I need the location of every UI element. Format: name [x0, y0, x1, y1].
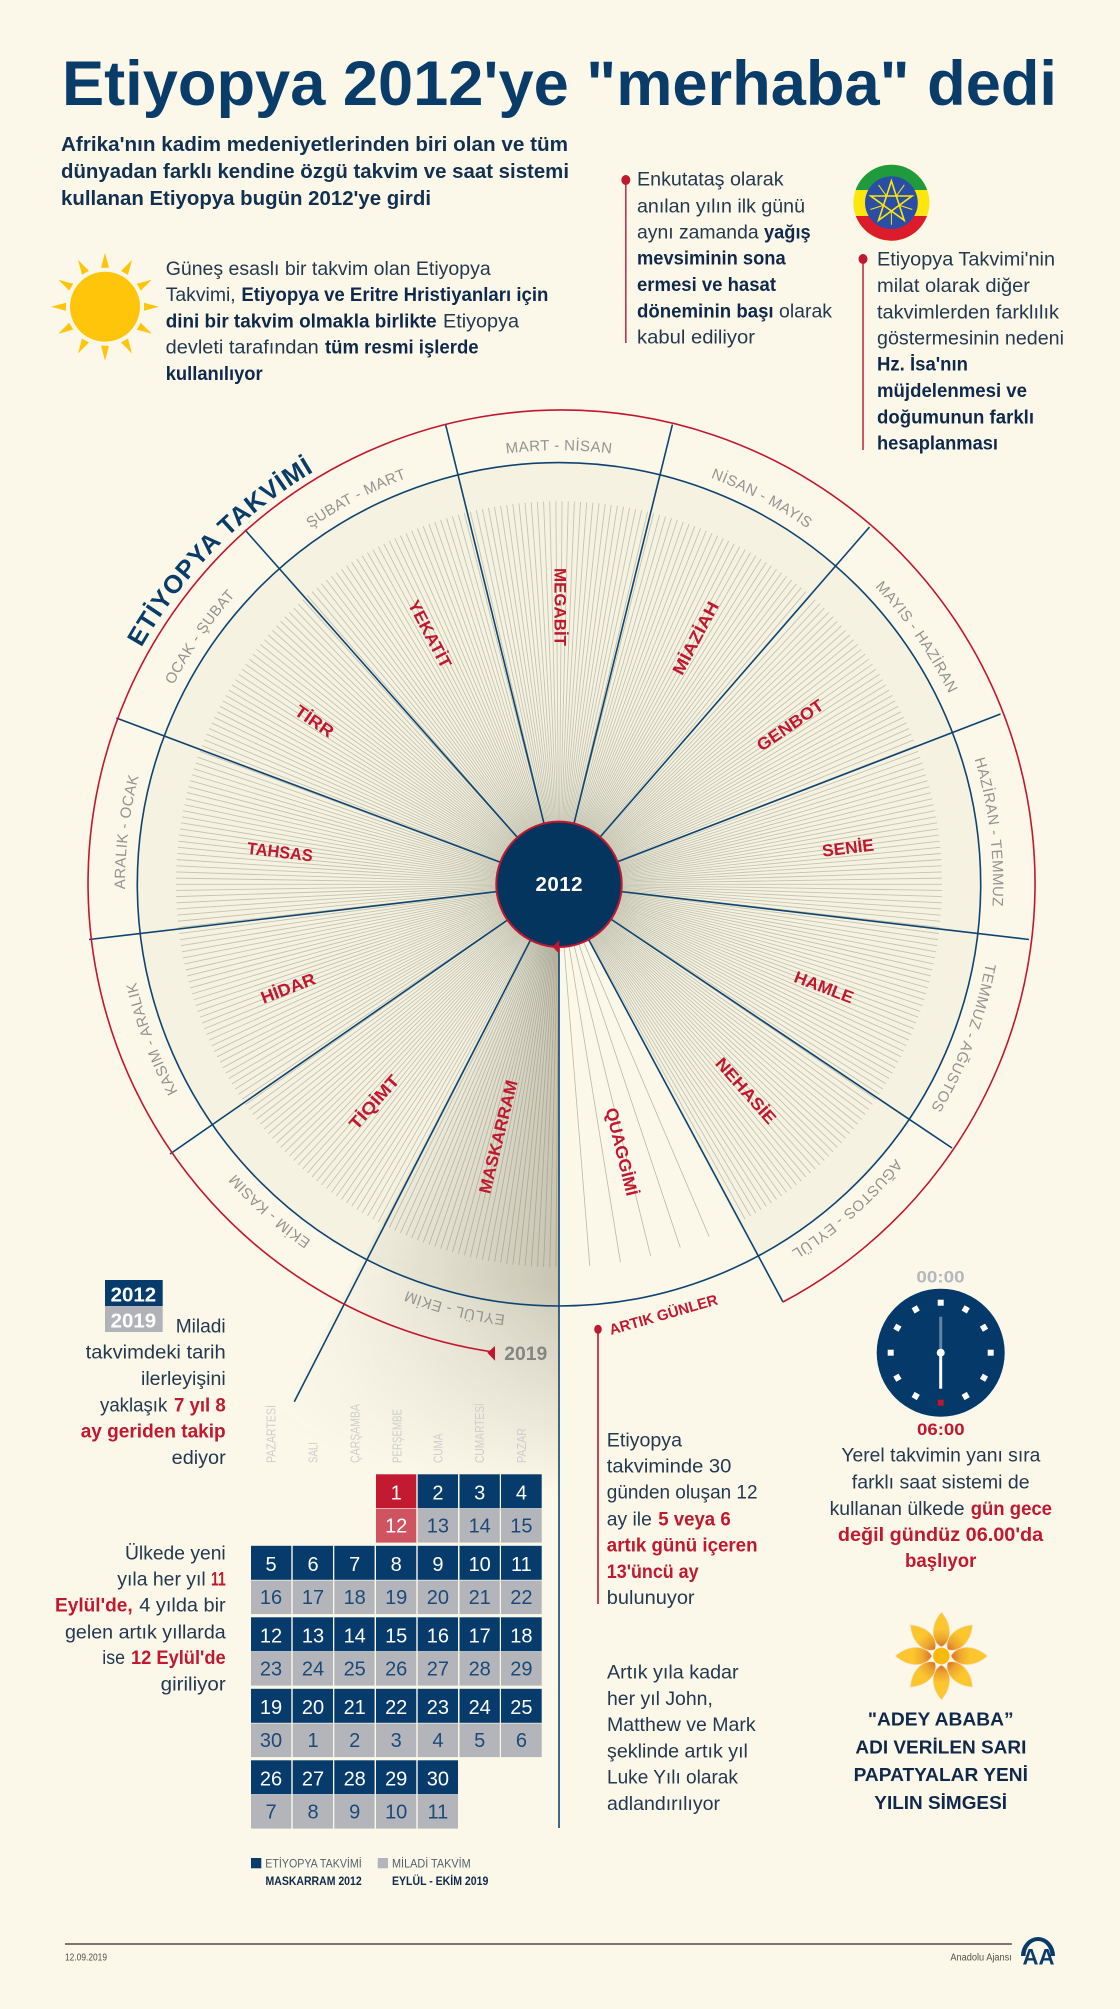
Ethiopian month labels: TİRR: [291, 701, 337, 741]
text block: 7 years 8 months behind: ay geriden takip: [81, 1421, 226, 1443]
calendar: weekday headers: PERŞEMBE: [390, 1409, 404, 1463]
callout: leap days: 13'üncü ay: [607, 1561, 699, 1583]
calendar: week 3: 18: [510, 1625, 533, 1647]
arrow: 2019 marker: [487, 1346, 495, 1361]
text block: solar calendar: devleti tarafından: [166, 336, 319, 358]
text block: 7 years 8 months behind: ilerleyişini: [141, 1368, 226, 1390]
calendar: week 1: 4: [516, 1482, 527, 1504]
calendar: week 2: 10: [469, 1554, 491, 1576]
calendar: week 2: [251, 1546, 542, 1614]
text block: solar calendar: dini bir takvim olmakla birlikte: [166, 310, 437, 332]
Gregorian month labels: EYLÜL - EKİM: [404, 1291, 504, 1325]
callout: leap days: bulunuyor: [607, 1587, 695, 1609]
Ethiopian month labels: GENBOT: [753, 695, 828, 755]
calendar: week 4: [251, 1689, 542, 1757]
calendar: week 1: [376, 1474, 542, 1543]
callout: calendar epoch: Hz. İsa'nın: [877, 353, 968, 376]
text block: Luke year: Matthew ve Mark: [607, 1714, 756, 1736]
text block: Luke year: Luke Yılı olarak: [607, 1767, 738, 1789]
text block: local time: başlıyor: [905, 1550, 977, 1572]
Gregorian month labels: HAZİRAN - TEMMUZ: [974, 757, 1004, 906]
text block: new year date: 11: [211, 1569, 226, 1591]
icon: clock: [877, 1289, 1005, 1417]
calendar: week 4: 21: [344, 1697, 366, 1719]
text block: local time: [830, 1445, 1052, 1572]
caption: Adey Ababa: [854, 1709, 1028, 1813]
calendar: week 4: 24: [469, 1697, 491, 1719]
subtitle: [61, 134, 569, 210]
text block: local time: farklı saat sistemi de: [852, 1471, 1030, 1493]
callout: calendar epoch: takvimlerden farklılık: [877, 301, 1059, 323]
logo: Anadolu Ajansi: AA: [1022, 1944, 1055, 1969]
caption: Adey Ababa: "ADEY ABABA”: [868, 1709, 1014, 1730]
callout: Enkutatas: Enkutataş olarak: [637, 169, 784, 191]
calendar: week 2: 8: [391, 1554, 402, 1576]
text block: local time: değil gündüz 06.00'da: [838, 1524, 1043, 1546]
calendar: week 1: 15: [510, 1516, 533, 1538]
inner disc: [137, 463, 981, 1306]
callout: calendar epoch: doğumunun farklı: [877, 406, 1034, 428]
Ethiopian month labels: NEHASİE: [711, 1054, 780, 1128]
text block: new year date: yıla her yıl: [117, 1569, 206, 1591]
calendar: week 2: 21: [469, 1587, 491, 1609]
text block: new year date: Ülkede yeni: [125, 1542, 226, 1564]
title: Etiyopya 2012'ye "merhaba" dedi: [62, 49, 1057, 119]
sector boundary lines: [89, 425, 1029, 1828]
text block: 7 years 8 months behind: [81, 1315, 226, 1469]
calendar: week 4: 19: [260, 1697, 282, 1719]
text block: new year date: gelen artık yıllarda: [65, 1621, 226, 1643]
text block: local time: kullanan ülkede: [830, 1498, 965, 1520]
calendar legend: EYLÜL - EKİM 2019: [392, 1873, 489, 1888]
inner ring: [137, 463, 981, 1306]
text block: solar calendar: Takvimi,: [166, 284, 236, 306]
text block: Luke year: adlandırılıyor: [607, 1793, 720, 1815]
text block: new year date: 4 yılda bir: [139, 1595, 226, 1617]
calendar: week 2: 6: [307, 1554, 319, 1576]
callout: leap days: 5 veya 6: [658, 1508, 731, 1530]
callout: Enkutatas: ermesi ve hasat: [637, 274, 776, 296]
Gregorian month labels: MAYIS - HAZİRAN: [876, 580, 958, 692]
shadow on Maskarram sector: [362, 942, 558, 1460]
calendar: week 3: 24: [302, 1659, 324, 1681]
calendar legend: MASKARRAM 2012: [266, 1874, 362, 1888]
text block: 7 years 8 months behind: takvimdeki tarih: [86, 1342, 226, 1364]
calendar: week 5: 29: [385, 1768, 407, 1790]
chart: Ethiopian calendar wheel: [87, 409, 1036, 1828]
calendar: week 5: 11: [428, 1802, 448, 1824]
callout: Enkutatas: olarak: [779, 300, 832, 322]
callout: leap days: ARTIK GÜNLER: [607, 1292, 720, 1339]
text block: solar calendar: Etiyopya: [443, 310, 519, 332]
callout: calendar epoch: milat olarak diğer: [877, 275, 1031, 297]
text block: Luke year: [607, 1661, 756, 1815]
calendar: week 4: 2: [349, 1730, 360, 1752]
Ethiopian month labels: MEGABİT: [550, 568, 570, 647]
calendar: week 2: 19: [385, 1587, 407, 1609]
calendar: week 5: 9: [349, 1802, 360, 1824]
calendar: week 2: 9: [432, 1554, 443, 1576]
callout: calendar epoch: Etiyopya Takvimi'nin: [877, 249, 1055, 271]
Ethiopian month labels: SENİE: [821, 836, 875, 861]
Ethiopian month labels: MASKARRAM: [475, 1078, 522, 1195]
callout: calendar epoch: göstermesinin nedeni: [877, 327, 1064, 349]
text block: Luke year: Artık yıla kadar: [607, 1661, 739, 1683]
Ethiopian month labels: [246, 568, 875, 1198]
text block: 7 years 8 months behind: Miladi: [176, 1315, 226, 1337]
calendar: week 3: 14: [344, 1625, 366, 1647]
day rays for the twelve months: [144, 470, 979, 1267]
calendar: week 5: 10: [385, 1802, 407, 1824]
clock label: 00:00: 00:00: [916, 1268, 965, 1287]
clock label: 06:00: 06:00: [917, 1420, 965, 1439]
calendar: weekday headers: PAZAR: [514, 1428, 529, 1463]
Quaggimi sector: [559, 884, 757, 1306]
callout: leap days: günden oluşan 12: [607, 1482, 758, 1504]
calendar: week 2: 7: [349, 1554, 360, 1576]
text block: local time: Yerel takvimin yanı sıra: [841, 1445, 1041, 1467]
text block: new year date: giriliyor: [161, 1674, 226, 1696]
callout: leap days: [594, 1292, 758, 1609]
calendar: week 5: 30: [427, 1768, 449, 1790]
calendar: week 3: 17: [469, 1625, 491, 1647]
calendar: week 3: [251, 1617, 542, 1686]
calendar: weekday headers: SALI: [306, 1442, 320, 1463]
calendar: week 2: 20: [427, 1587, 449, 1609]
Ethiopian month labels: HAMLE: [791, 968, 856, 1007]
calendar: weekday headers: ÇARŞAMBA: [348, 1404, 362, 1463]
calendar legend: MİLADİ TAKVİM: [392, 1856, 471, 1870]
text block: solar calendar: kullanılıyor: [166, 363, 263, 385]
center circle: [496, 822, 622, 947]
calendar: week 1: 1: [391, 1482, 402, 1504]
legend boxes: 2012 and 2019: [105, 1280, 163, 1332]
subtitle: kullanan Etiyopya bugün 2012'ye girdi: [61, 188, 431, 210]
calendar: week 2: 11: [511, 1554, 532, 1576]
arrow: center marker: [553, 940, 559, 954]
icon: yellow daisy: [895, 1612, 988, 1700]
calendar: week 3: 16: [427, 1625, 449, 1647]
callout: leap days: ay ile: [607, 1508, 652, 1530]
calendar: week 5: 27: [302, 1768, 324, 1790]
calendar: week 5: 28: [344, 1768, 366, 1790]
text block: Luke year: şeklinde artık yıl: [607, 1740, 748, 1762]
calendar: week 1: 2: [432, 1482, 443, 1504]
label: 2019: 2019: [504, 1343, 547, 1365]
calendar: week 3: 23: [260, 1659, 282, 1681]
legend boxes: 2012 and 2019: 2019: [111, 1310, 156, 1332]
callout: calendar epoch: müjdelenmesi ve: [877, 380, 1027, 402]
subtitle: Afrika'nın kadim medeniyetlerinden biri olan ve tüm: [61, 134, 568, 156]
Gregorian month labels: [114, 438, 1004, 1325]
calendar: week 1: 13: [427, 1516, 449, 1538]
calendar: week 2: 18: [344, 1587, 366, 1609]
text block: solar calendar: tüm resmi işlerde: [325, 336, 479, 358]
Ethiopian month labels: MİAZİAH: [669, 598, 723, 678]
calendar: week 4: 4: [432, 1730, 443, 1752]
caption: Adey Ababa: ADI VERİLEN SARI: [855, 1736, 1026, 1757]
Gregorian month labels: ARALIK - OCAK: [114, 774, 138, 890]
calendar: week 3: 27: [427, 1659, 449, 1681]
text block: 7 years 8 months behind: ediyor: [172, 1447, 226, 1469]
callout: Enkutatas: yağış: [764, 221, 811, 243]
Ethiopian month labels: TİQİMT: [345, 1071, 404, 1133]
calendar: week 3: 12: [260, 1625, 282, 1647]
icon: Ethiopian flag: [853, 165, 929, 241]
footer rule: [65, 1943, 1012, 1945]
calendar: week 3: 26: [385, 1659, 407, 1681]
Quaggimi five rays: [564, 941, 709, 1266]
text block: 7 years 8 months behind: 7 yıl 8: [174, 1395, 226, 1417]
Gregorian month labels: KASIM - ARALIK: [126, 982, 178, 1096]
outer red arc: [88, 410, 1035, 1352]
text block: 7 years 8 months behind: yaklaşık: [100, 1395, 168, 1417]
calendar: weekday headers: CUMARTESİ: [472, 1403, 487, 1463]
callout: Enkutatas: kabul ediliyor: [637, 326, 756, 348]
calendar: week 4: 23: [427, 1697, 449, 1719]
Ethiopian month labels: TAHSAS: [246, 839, 314, 866]
calendar: week 4: 22: [385, 1697, 407, 1719]
calendar: week 4: 25: [510, 1697, 533, 1719]
calendar: weekday headers: CUMA: [430, 1433, 446, 1463]
calendar: week 3: 28: [469, 1659, 491, 1681]
calendar: week 2: 22: [510, 1587, 533, 1609]
calendar: week 2: 5: [265, 1554, 277, 1576]
calendar: week 2: 17: [302, 1587, 324, 1609]
calendar: week 4: 30: [260, 1730, 282, 1752]
calendar: week 3: 13: [302, 1625, 324, 1647]
calendar: week 5: 7: [265, 1802, 277, 1824]
text block: new year date: 12 Eylül'de: [131, 1647, 226, 1669]
footer date: 12.09.2019: [65, 1953, 107, 1964]
caption: Adey Ababa: PAPATYALAR YENİ: [854, 1764, 1028, 1785]
callout: Enkutatas: [621, 169, 832, 348]
Gregorian month labels: TEMMUZ - AĞUSTOS: [932, 965, 996, 1112]
text block: solar calendar: Güneş esaslı bir takvim olan Etiyopya: [166, 258, 491, 280]
Gregorian month labels: NİSAN - MAYIS: [712, 468, 812, 527]
Gregorian month labels: AĞUSTOS - EYLÜL: [792, 1158, 900, 1256]
callout: Enkutatas: aynı zamanda: [637, 221, 759, 243]
callout: leap days: takviminde 30: [607, 1456, 732, 1478]
calendar: week 5: 26: [260, 1768, 282, 1790]
calendar: week 3: 29: [510, 1659, 533, 1681]
callout: leap days: Etiyopya: [607, 1430, 682, 1452]
Gregorian month labels: EKİM - KASIM: [228, 1174, 310, 1248]
callout: calendar epoch: hesaplanması: [877, 433, 998, 455]
callout: calendar epoch: [858, 249, 1064, 455]
subtitle: dünyadan farklı kendine özgü takvim ve saat sistemi: [61, 161, 569, 183]
calendar: week 5: [251, 1760, 458, 1829]
calendar: week 1: 12: [385, 1516, 407, 1538]
text block: local time: gün gece: [971, 1498, 1052, 1520]
Gregorian month labels: ŞUBAT - MART: [306, 468, 403, 529]
Gregorian month labels: MART - NİSAN: [506, 438, 612, 454]
caption: Adey Ababa: YILIN SİMGESİ: [874, 1792, 1007, 1813]
footer source: Anadolu Ajansı: [950, 1953, 1012, 1964]
Ethiopian month labels: YEKATİT: [404, 597, 455, 672]
text block: new year date: Eylül'de,: [55, 1595, 133, 1617]
text block: Luke year: her yıl John,: [607, 1688, 713, 1710]
heading: Etiyopya Takvimi: ETİYOPYA TAKVİMİ: [127, 454, 312, 646]
calendar legend: [251, 1856, 489, 1888]
calendar: week 2: 16: [260, 1587, 282, 1609]
Gregorian month labels: OCAK - ŞUBAT: [166, 589, 232, 683]
calendar: week 4: 20: [302, 1697, 324, 1719]
calendar legend: ETİYOPYA TAKVİMİ: [265, 1856, 362, 1870]
calendar: week 1: 14: [469, 1516, 491, 1538]
center year: 2012: [536, 873, 582, 896]
text block: solar calendar: Etiyopya ve Eritre Hristiyanları için: [241, 284, 548, 306]
icon: sun: [51, 253, 159, 361]
callout: leap days: artık günü içeren: [607, 1535, 758, 1557]
calendar: week 5: 8: [307, 1802, 319, 1824]
callout: Enkutatas: döneminin başı: [637, 300, 774, 322]
text block: new year date: ise: [102, 1647, 125, 1669]
calendar: week 4: 6: [516, 1730, 527, 1752]
calendar: weekday headers: [264, 1403, 529, 1463]
callout: Enkutatas: mevsiminin sona: [637, 248, 786, 270]
Ethiopian month labels: HİDAR: [258, 969, 318, 1007]
calendar: week 3: 15: [385, 1625, 407, 1647]
calendar: week 4: 5: [474, 1730, 485, 1752]
calendar: week 3: 25: [344, 1659, 366, 1681]
text block: new year date: [55, 1542, 226, 1696]
legend boxes: 2012 and 2019: 2012: [111, 1284, 156, 1306]
calendar: weekday headers: PAZARTESİ: [264, 1405, 278, 1463]
callout: Enkutatas: anılan yılın ilk günü: [637, 195, 805, 217]
Ethiopian month labels: QUAGGİMİ: [602, 1106, 642, 1198]
calendar: week 4: 1: [307, 1730, 319, 1752]
calendar: week 1: 3: [474, 1482, 485, 1504]
text block: solar calendar: [166, 258, 548, 385]
calendar: week 4: 3: [391, 1730, 402, 1752]
